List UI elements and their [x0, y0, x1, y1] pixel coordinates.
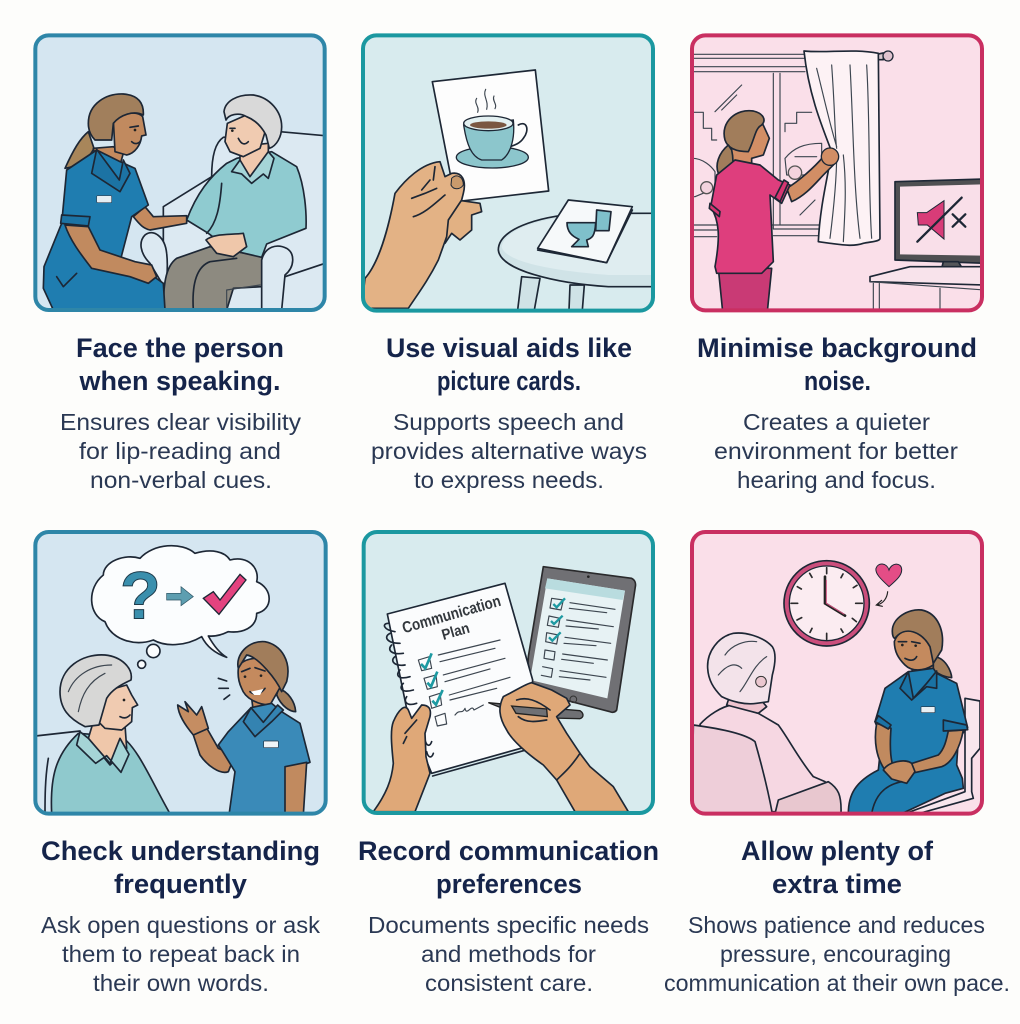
- panel: minimise noise: [692, 35, 985, 312]
- older woman: [163, 95, 306, 310]
- question mark: ?: [120, 559, 161, 633]
- armchair: [140, 131, 323, 282]
- check mark: [203, 574, 246, 614]
- text block: visual aids: to express needs.: [414, 467, 604, 493]
- wall clock: [784, 561, 869, 646]
- panel: check understanding: [35, 532, 326, 815]
- panel: nurse facing seated older woman: [35, 35, 325, 310]
- older person from behind: [700, 633, 841, 814]
- text block: face the person: non-verbal cues.: [90, 467, 272, 493]
- nurse seated: [848, 610, 980, 814]
- hand holding card: [362, 162, 482, 308]
- arrow: [167, 587, 193, 606]
- text block: record preferences: and methods for: [421, 941, 596, 967]
- notebook: Plan: [440, 620, 472, 644]
- text block: check understanding: their own words.: [93, 970, 269, 996]
- panel: record preferences: [364, 532, 653, 813]
- text block: background noise: environment for better: [714, 438, 958, 464]
- text block: record preferences: Record communication: [358, 836, 659, 866]
- text block: visual aids: Supports speech and: [393, 409, 624, 435]
- curved arrow: [876, 592, 888, 606]
- armchair from behind: [692, 725, 772, 814]
- text block: extra time: communication at their own pace.: [664, 970, 1010, 996]
- right hand and pen: [488, 683, 628, 812]
- left hand: [373, 705, 430, 812]
- text block: record preferences: [358, 836, 659, 996]
- nurse: [178, 642, 310, 815]
- text block: extra time: pressure, encouraging: [720, 941, 951, 967]
- text block: visual aids: picture cards.: [437, 366, 581, 396]
- speech bubble: [92, 546, 269, 657]
- heart: [876, 564, 902, 587]
- TV with mute symbol: [894, 178, 980, 266]
- window and street view: [694, 54, 822, 238]
- nurse: [43, 94, 187, 310]
- text block: background noise: Creates a quieter: [743, 409, 930, 435]
- text block: check understanding: them to repeat back in: [62, 941, 300, 967]
- text block: visual aids: [371, 333, 647, 493]
- thought dots: [138, 644, 160, 668]
- panel: allow extra time: [692, 532, 982, 814]
- text block: extra time: [664, 836, 1010, 996]
- text block: visual aids: provides alternative ways: [371, 438, 647, 464]
- tablet: [527, 567, 636, 712]
- table with toilet card: [498, 200, 655, 310]
- text block: background noise: [697, 333, 977, 493]
- curtain: [804, 51, 880, 245]
- text block: face the person: Face the person: [76, 333, 284, 363]
- text block: face the person: when speaking.: [79, 366, 281, 396]
- notebook: [384, 583, 533, 776]
- older woman: [35, 655, 170, 814]
- text block: visual aids: Use visual aids like: [386, 333, 632, 363]
- right armrest: [227, 246, 325, 310]
- TV stand: [870, 267, 985, 312]
- text block: check understanding: frequently: [114, 869, 247, 899]
- text block: check understanding: Check understanding: [41, 836, 320, 866]
- text block: check understanding: Ask open questions or ask: [41, 912, 321, 938]
- text block: background noise: hearing and focus.: [737, 467, 936, 493]
- curtain rail: [877, 51, 893, 61]
- text block: background noise: Minimise background: [697, 333, 977, 363]
- text block: face the person: [60, 333, 302, 493]
- text block: extra time: extra time: [772, 869, 902, 899]
- text block: face the person: for lip-reading and: [79, 438, 281, 464]
- text block: record preferences: consistent care.: [425, 970, 593, 996]
- text block: extra time: Shows patience and reduces: [688, 912, 985, 938]
- text block: face the person: Ensures clear visibility: [60, 409, 302, 435]
- text block: record preferences: preferences: [436, 869, 582, 899]
- text block: background noise: noise.: [804, 366, 871, 396]
- panel: picture cards: [362, 35, 655, 311]
- notebook title: Communication: [400, 593, 503, 637]
- text block: record preferences: Documents specific needs: [368, 912, 649, 938]
- text block: extra time: Allow plenty of: [741, 836, 934, 866]
- text block: check understanding: [41, 836, 321, 996]
- picture card with cup: [432, 70, 549, 202]
- carer in pink: [709, 111, 839, 312]
